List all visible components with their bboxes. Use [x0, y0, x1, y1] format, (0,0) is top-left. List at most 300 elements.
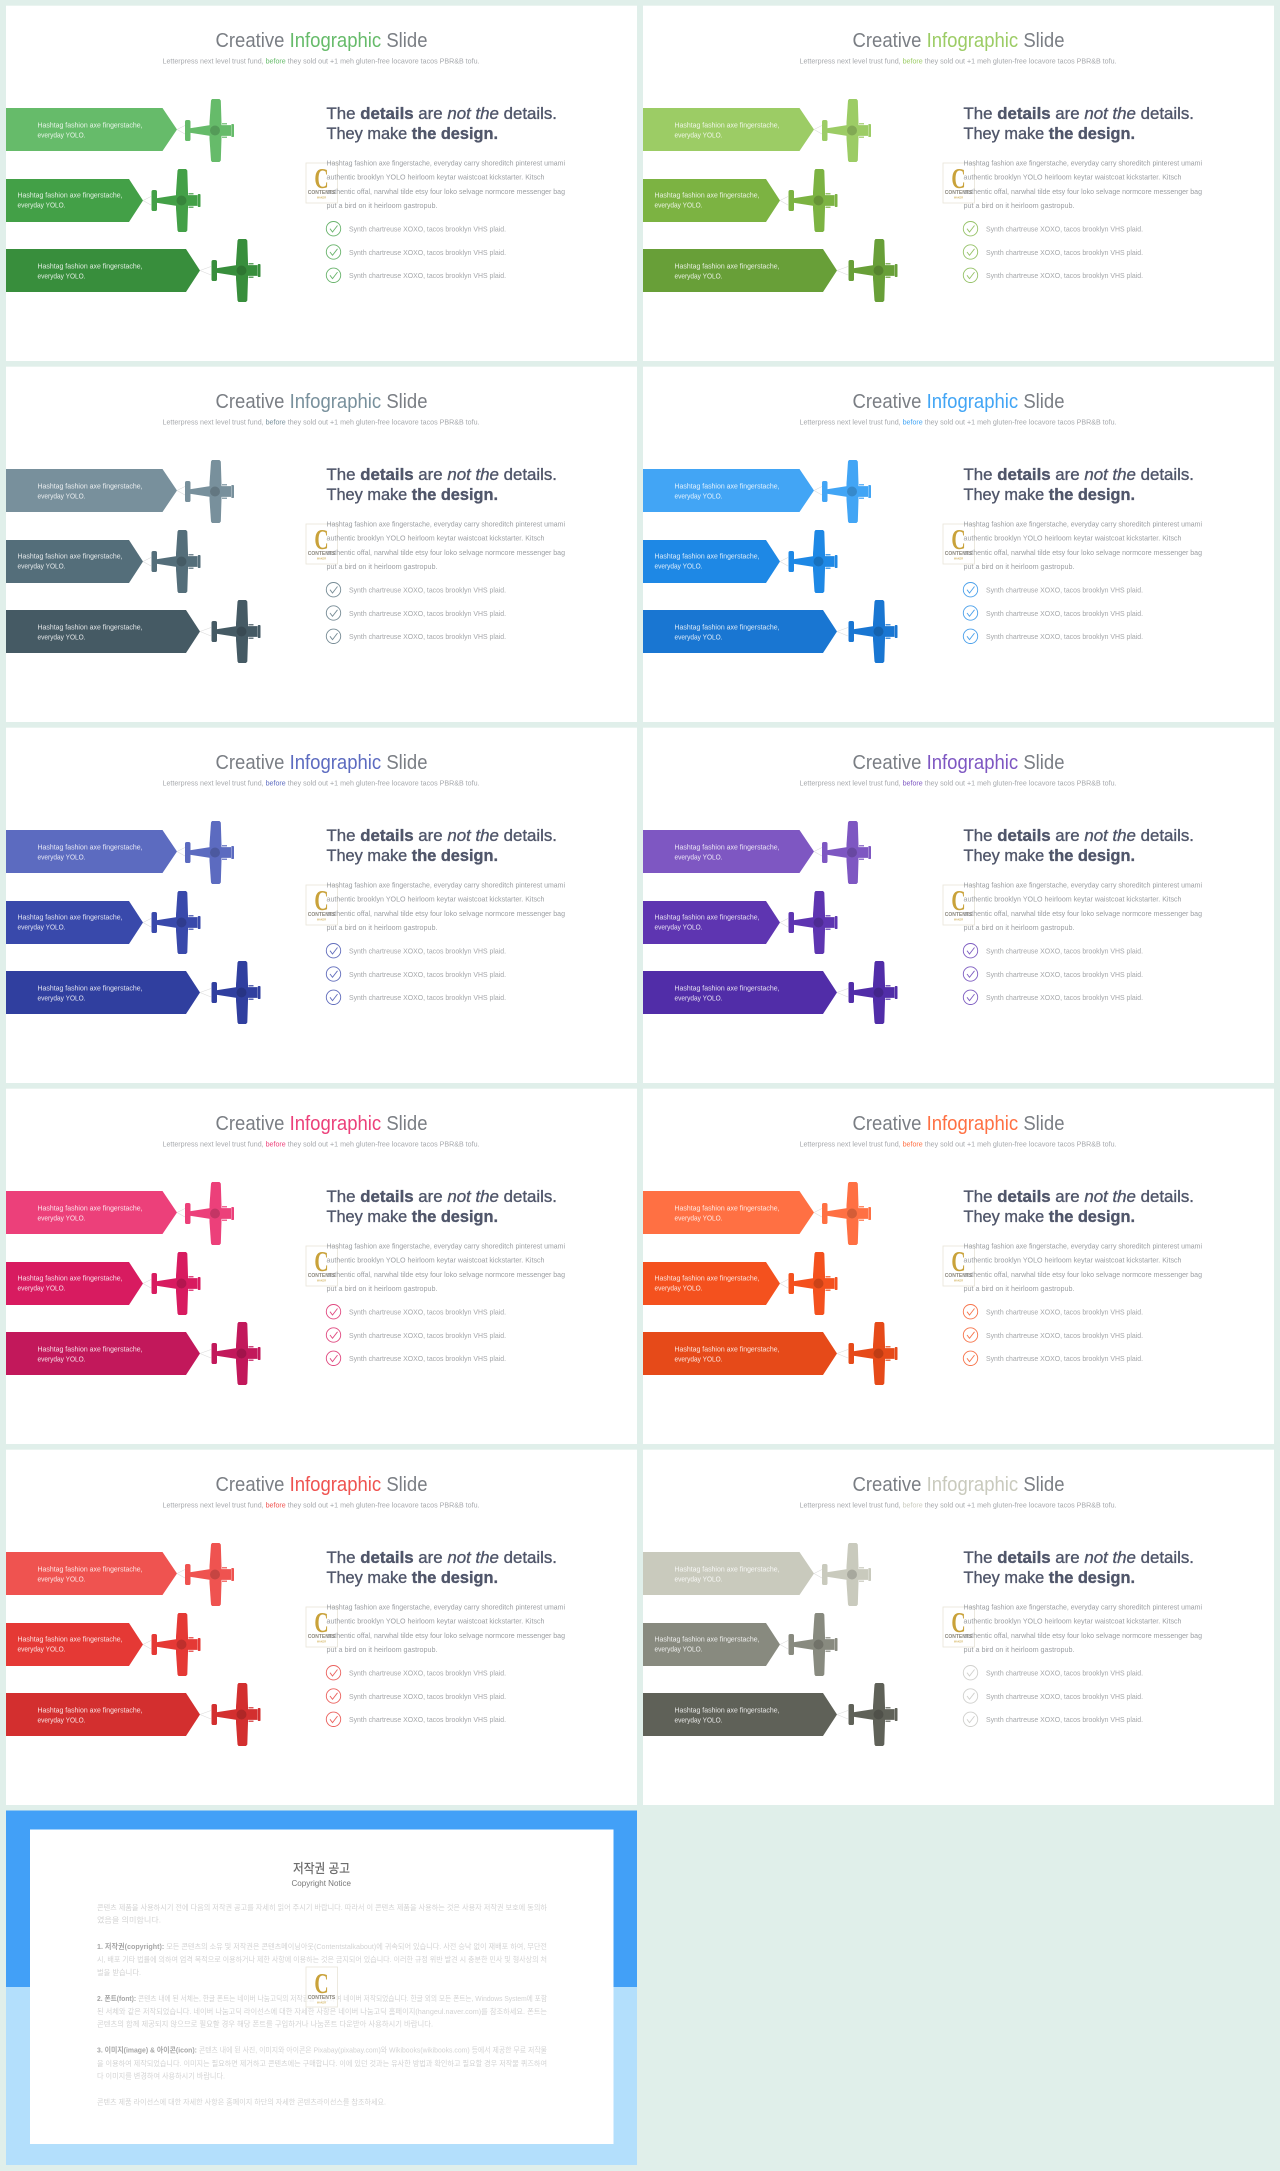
watermark logo: C: [951, 524, 966, 556]
watermark logo: CONTENTS: [945, 912, 973, 918]
watermark logo: C: [314, 885, 329, 917]
arrow banner 3: everyday YOLO.: [674, 1716, 722, 1724]
watermark logo: CONTENTS: [308, 912, 336, 918]
arrow banner 2: Hashtag fashion axe fingerstache,: [18, 552, 122, 560]
section 1: copyright: 벌을 받습니다.: [97, 1968, 141, 1977]
paragraph: authentic brooklyn YOLO heirloom keytar waistcoat kickstarter. Kitsch: [964, 1256, 1182, 1264]
checklist: Synth chartreuse XOXO, tacos brooklyn VHS plaid.: [349, 946, 506, 956]
panel: slide 10 grey: [643, 1450, 1274, 1805]
checklist: [963, 1666, 1143, 1726]
plane 2: [143, 891, 200, 954]
arrow banner 2: everyday YOLO.: [654, 562, 702, 570]
section 2: font: 된 서체와 같은 저작되었습니다. 네이버 나눔고딕 라이선스에 대한 자세한 사항은 네이버 나눔고딕 홈페이지(hangeul.naver.com)를 참조하세요. 폰트는: [97, 2007, 547, 2016]
watermark logo: [306, 163, 338, 203]
arrow banner 3: [6, 249, 200, 292]
plane 3: [200, 961, 260, 1024]
arrow banner 1: [6, 1191, 177, 1234]
heading: They make the design.: [326, 486, 498, 504]
watermark logo: [306, 524, 338, 564]
plane 1: [177, 1182, 234, 1245]
watermark logo: [306, 1967, 338, 2007]
watermark logo: C: [314, 1968, 329, 2000]
panel: slide 1 green: [6, 6, 637, 361]
plane 2: [143, 530, 200, 593]
watermark logo: MAKER: [954, 918, 963, 922]
checklist: [963, 222, 1143, 282]
paragraph: authentic offal, narwhal tilde etsy four loko selvage normcore messenger bag: [964, 1270, 1202, 1279]
title: Creative Infographic Slide: [852, 30, 1064, 52]
paragraph: put a bird on it heirloom gastropub.: [964, 1284, 1074, 1293]
arrow banner 3: Hashtag fashion axe fingerstache,: [38, 622, 142, 632]
panel: slide 8 orange: [643, 1089, 1274, 1444]
section 1: copyright: 1. 저작권(copyright): 모든 콘텐츠의 소유 및 저작권은 콘텐츠메이닝아웃(Contentstalkabout)에 귀속되어 있습니다. 사전 승낙 없이 재배포 하여, 무단전: [97, 1942, 547, 1951]
heading: [326, 105, 557, 143]
checklist: Synth chartreuse XOXO, tacos brooklyn VHS plaid.: [349, 1331, 506, 1340]
title: Creative Infographic Slide: [852, 1113, 1064, 1135]
checklist: [326, 1666, 506, 1726]
heading: The details are not the details.: [964, 466, 1194, 484]
checklist: Synth chartreuse XOXO, tacos brooklyn VHS plaid.: [986, 946, 1143, 956]
arrow banner 3: [6, 971, 200, 1014]
subtitle: Letterpress next level trust fund, before they sold out +1 meh gluten-free locavore tacos PBR&B tofu.: [800, 418, 1116, 426]
plane 2: [780, 1613, 838, 1676]
plane 1: [814, 460, 871, 523]
paragraph: authentic brooklyn YOLO heirloom keytar waistcoat kickstarter. Kitsch: [326, 1256, 544, 1264]
arrow banner 1: Hashtag fashion axe fingerstache,: [674, 1204, 780, 1212]
plane 3: [837, 961, 898, 1024]
watermark logo: CONTENTS: [308, 551, 336, 557]
watermark logo: C: [951, 163, 966, 195]
watermark logo: C: [314, 1246, 329, 1278]
checklist: Synth chartreuse XOXO, tacos brooklyn VHS plaid.: [986, 993, 1143, 1002]
arrow banner 1: [643, 469, 814, 512]
plane 1: [177, 99, 234, 162]
arrow banner 3: everyday YOLO.: [38, 994, 86, 1002]
arrow banner 2: [6, 540, 143, 583]
title: Creative Infographic Slide: [852, 752, 1064, 774]
arrow banner 1: everyday YOLO.: [38, 492, 86, 500]
arrow banner 2: Hashtag fashion axe fingerstache,: [18, 190, 122, 200]
arrow banner 2: everyday YOLO.: [18, 1284, 66, 1292]
heading: The details are not the details.: [326, 1188, 557, 1206]
watermark logo: MAKER: [317, 2000, 326, 2004]
arrow banner 3: [643, 610, 837, 653]
arrow banner 2: everyday YOLO.: [654, 1284, 702, 1292]
watermark logo: CONTENTS: [945, 1273, 973, 1279]
watermark logo: [306, 885, 338, 925]
checklist: [326, 1304, 506, 1366]
paragraph: Hashtag fashion axe fingerstache, everyday carry shoreditch pinterest umami: [964, 520, 1202, 528]
heading: They make the design.: [964, 847, 1135, 865]
heading: They make the design.: [326, 847, 498, 865]
intro text: 콘텐츠 제품을 사용하시기 전에 다음의 저작권 공고를 자세히 읽어 주시기 바랍니다. 따라서 이 콘텐츠 제품을 사용하는 것은 사용자 저작권 보호에 동의하: [97, 1903, 547, 1912]
paragraph: authentic brooklyn YOLO heirloom keytar waistcoat kickstarter. Kitsch: [326, 534, 544, 542]
watermark logo: MAKER: [954, 1640, 963, 1644]
arrow banner 3: everyday YOLO.: [674, 632, 722, 642]
heading: The details are not the details.: [964, 1188, 1194, 1206]
paragraph: authentic offal, narwhal tilde etsy four loko selvage normcore messenger bag: [964, 1631, 1202, 1640]
subtitle: Letterpress next level trust fund, before they sold out +1 meh gluten-free locavore tacos PBR&B tofu.: [800, 56, 1116, 66]
arrow banner 2: everyday YOLO.: [18, 200, 66, 210]
arrow banner 1: [6, 1552, 177, 1595]
watermark logo: CONTENTS: [945, 551, 973, 557]
paragraph: put a bird on it heirloom gastropub.: [964, 923, 1074, 932]
arrow banner 1: Hashtag fashion axe fingerstache,: [38, 1204, 142, 1212]
heading: [964, 1549, 1194, 1587]
plane 1: [177, 821, 234, 884]
checklist: Synth chartreuse XOXO, tacos brooklyn VHS plaid.: [349, 224, 506, 234]
paragraph: authentic brooklyn YOLO heirloom keytar waistcoat kickstarter. Kitsch: [326, 1616, 544, 1626]
watermark logo: [943, 885, 974, 925]
checklist: Synth chartreuse XOXO, tacos brooklyn VHS plaid.: [986, 1331, 1143, 1340]
arrow banner 3: Hashtag fashion axe fingerstache,: [38, 1706, 142, 1714]
watermark logo: C: [951, 1246, 966, 1278]
checklist: Synth chartreuse XOXO, tacos brooklyn VHS plaid.: [349, 993, 506, 1002]
paragraph: Hashtag fashion axe fingerstache, everyday carry shoreditch pinterest umami: [326, 880, 565, 890]
arrow banner 2: everyday YOLO.: [654, 1644, 702, 1654]
section 3: image and icon: [97, 2046, 547, 2080]
paragraph: [326, 880, 565, 932]
arrow banner 1: Hashtag fashion axe fingerstache,: [38, 842, 142, 852]
watermark logo: CONTENTS: [945, 190, 973, 196]
subtitle: Letterpress next level trust fund, before they sold out +1 meh gluten-free locavore tacos PBR&B tofu.: [162, 56, 480, 66]
arrow banner 1: Hashtag fashion axe fingerstache,: [674, 482, 780, 490]
paragraph: authentic brooklyn YOLO heirloom keytar waistcoat kickstarter. Kitsch: [964, 894, 1182, 904]
checklist: [326, 582, 506, 644]
checklist: Synth chartreuse XOXO, tacos brooklyn VHS plaid.: [986, 248, 1143, 257]
arrow banner 3: everyday YOLO.: [674, 994, 722, 1002]
heading: The details are not the details.: [326, 827, 557, 845]
watermark logo: [306, 1607, 338, 1647]
paragraph: Hashtag fashion axe fingerstache, everyday carry shoreditch pinterest umami: [964, 1602, 1202, 1612]
plane 3: [837, 600, 898, 663]
checklist: Synth chartreuse XOXO, tacos brooklyn VHS plaid.: [349, 1715, 506, 1724]
arrow banner 3: Hashtag fashion axe fingerstache,: [674, 984, 780, 992]
paragraph: [326, 1242, 565, 1293]
paragraph: authentic brooklyn YOLO heirloom keytar waistcoat kickstarter. Kitsch: [964, 172, 1182, 182]
plane 2: [780, 530, 838, 593]
intro text: [97, 1903, 547, 1924]
section 2: font: 콘텐츠의 함께 제공되지 않으므로 필요할 경우 해당 폰트를 구입하거나 나눔폰트 다운받아 사용하시기 바랍니다.: [97, 2020, 433, 2028]
intro text: 였음을 의미합니다.: [97, 1916, 161, 1924]
heading: [326, 827, 557, 865]
heading: They make the design.: [326, 1208, 498, 1226]
arrow banner 3: [6, 1693, 200, 1736]
title: Creative Infographic Slide: [852, 1474, 1064, 1496]
arrow banner 3: Hashtag fashion axe fingerstache,: [674, 262, 780, 270]
arrow banner 3: Hashtag fashion axe fingerstache,: [38, 262, 142, 270]
arrow banner 1: Hashtag fashion axe fingerstache,: [38, 1564, 142, 1574]
arrow banner 3: everyday YOLO.: [674, 1354, 722, 1364]
plane 1: [814, 99, 871, 162]
heading: [326, 466, 557, 504]
checklist: Synth chartreuse XOXO, tacos brooklyn VHS plaid.: [349, 248, 506, 257]
paragraph: put a bird on it heirloom gastropub.: [326, 201, 438, 210]
plane 2: [780, 169, 838, 232]
heading: [964, 466, 1194, 504]
checklist: Synth chartreuse XOXO, tacos brooklyn VHS plaid.: [986, 632, 1143, 641]
arrow banner 2: [6, 179, 143, 222]
paragraph: put a bird on it heirloom gastropub.: [964, 201, 1074, 210]
arrow banner 1: Hashtag fashion axe fingerstache,: [674, 120, 780, 130]
checklist: Synth chartreuse XOXO, tacos brooklyn VHS plaid.: [986, 1668, 1143, 1678]
plane 3: [837, 1683, 898, 1746]
heading: They make the design.: [326, 1569, 498, 1587]
arrow banner 1: everyday YOLO.: [38, 852, 86, 862]
arrow banner 3: Hashtag fashion axe fingerstache,: [38, 1344, 142, 1354]
arrow banner 3: [643, 971, 837, 1014]
arrow banner 1: [6, 469, 177, 512]
panel: slide 3 blue grey: [6, 367, 637, 722]
arrow banner 2: [643, 1262, 780, 1305]
plane 2: [143, 1252, 200, 1315]
paragraph: authentic offal, narwhal tilde etsy four loko selvage normcore messenger bag: [326, 187, 565, 196]
arrow banner 3: [6, 1332, 200, 1375]
subtitle: Letterpress next level trust fund, before they sold out +1 meh gluten-free locavore tacos PBR&B tofu.: [800, 778, 1116, 788]
paragraph: put a bird on it heirloom gastropub.: [964, 562, 1074, 571]
checklist: [963, 582, 1143, 644]
heading: [326, 1549, 557, 1587]
plane 1: [814, 821, 871, 884]
paragraph: Hashtag fashion axe fingerstache, everyday carry shoreditch pinterest umami: [326, 1242, 565, 1250]
watermark logo: C: [314, 163, 329, 195]
checklist: [326, 944, 506, 1004]
plane 3: [200, 239, 260, 302]
arrow banner 3: Hashtag fashion axe fingerstache,: [674, 1344, 780, 1354]
arrow banner 1: [643, 1552, 814, 1595]
arrow banner 2: [643, 901, 780, 944]
heading: The details are not the details.: [326, 105, 557, 123]
watermark logo: CONTENTS: [308, 1273, 336, 1279]
paragraph: [326, 1602, 565, 1654]
panel: slide 5 indigo: [6, 728, 637, 1083]
arrow banner 2: Hashtag fashion axe fingerstache,: [654, 1634, 760, 1644]
arrow banner 2: Hashtag fashion axe fingerstache,: [654, 912, 760, 922]
plane 2: [143, 169, 200, 232]
checklist: Synth chartreuse XOXO, tacos brooklyn VHS plaid.: [986, 609, 1143, 618]
plane 3: [200, 1683, 260, 1746]
checklist: Synth chartreuse XOXO, tacos brooklyn VHS plaid.: [349, 609, 506, 618]
watermark logo: C: [314, 524, 329, 556]
heading: [326, 1188, 557, 1226]
paragraph: put a bird on it heirloom gastropub.: [326, 923, 438, 932]
arrow banner 3: everyday YOLO.: [674, 272, 722, 280]
arrow banner 3: everyday YOLO.: [38, 272, 86, 280]
panel: copyright notice: [6, 1810, 637, 2165]
arrow banner 2: Hashtag fashion axe fingerstache,: [18, 1274, 122, 1282]
arrow banner 1: Hashtag fashion axe fingerstache,: [674, 1564, 780, 1574]
paragraph: [964, 158, 1202, 210]
heading: They make the design.: [964, 1569, 1135, 1587]
title: Creative Infographic Slide: [852, 391, 1064, 413]
arrow banner 2: Hashtag fashion axe fingerstache,: [18, 1634, 122, 1644]
arrow banner 1: [643, 830, 814, 873]
watermark logo: CONTENTS: [308, 1995, 336, 2001]
arrow banner 3: Hashtag fashion axe fingerstache,: [38, 984, 142, 992]
checklist: Synth chartreuse XOXO, tacos brooklyn VHS plaid.: [986, 970, 1143, 979]
arrow banner 2: everyday YOLO.: [654, 200, 702, 210]
paragraph: Hashtag fashion axe fingerstache, everyday carry shoreditch pinterest umami: [326, 520, 565, 528]
arrow banner 2: everyday YOLO.: [18, 1644, 66, 1654]
checklist: Synth chartreuse XOXO, tacos brooklyn VHS plaid.: [349, 271, 506, 280]
arrow banner 3: [643, 1693, 837, 1736]
watermark logo: [943, 524, 974, 564]
panel: slide 6 purple: [643, 728, 1274, 1083]
checklist: Synth chartreuse XOXO, tacos brooklyn VHS plaid.: [349, 970, 506, 979]
paragraph: authentic offal, narwhal tilde etsy four loko selvage normcore messenger bag: [326, 1631, 565, 1640]
subtitle: Letterpress next level trust fund, before they sold out +1 meh gluten-free locavore tacos PBR&B tofu.: [162, 418, 480, 426]
checklist: [963, 1304, 1143, 1366]
paragraph: Hashtag fashion axe fingerstache, everyday carry shoreditch pinterest umami: [964, 158, 1202, 168]
paragraph: [964, 520, 1202, 571]
watermark logo: C: [314, 1607, 329, 1639]
paragraph: [964, 1242, 1202, 1293]
paragraph: authentic offal, narwhal tilde etsy four loko selvage normcore messenger bag: [326, 548, 565, 557]
checklist: Synth chartreuse XOXO, tacos brooklyn VHS plaid.: [986, 224, 1143, 234]
panel: slide 2 light green: [643, 6, 1274, 361]
arrow banner 1: everyday YOLO.: [674, 130, 722, 140]
paragraph: authentic offal, narwhal tilde etsy four loko selvage normcore messenger bag: [964, 909, 1202, 918]
arrow banner 2: [6, 1623, 143, 1666]
arrow banner 1: [6, 108, 177, 151]
watermark logo: MAKER: [317, 196, 326, 200]
plane 1: [814, 1182, 871, 1245]
heading: The details are not the details.: [326, 466, 557, 484]
arrow banner 2: [643, 179, 780, 222]
plane 1: [177, 1543, 234, 1606]
paragraph: put a bird on it heirloom gastropub.: [326, 562, 438, 571]
plane 1: [177, 460, 234, 523]
plane 3: [837, 1322, 898, 1385]
arrow banner 2: [6, 901, 143, 944]
checklist: Synth chartreuse XOXO, tacos brooklyn VHS plaid.: [349, 1308, 506, 1316]
arrow banner 1: everyday YOLO.: [674, 852, 722, 862]
paragraph: put a bird on it heirloom gastropub.: [326, 1645, 438, 1654]
section 3: image and icon: 다 이미지를 변경하여 사용하시기 바랍니다.: [97, 2072, 225, 2080]
arrow banner 1: Hashtag fashion axe fingerstache,: [38, 482, 142, 490]
plane 3: [200, 600, 260, 663]
copyright title: 저작권 공고: [293, 1861, 350, 1876]
checklist: Synth chartreuse XOXO, tacos brooklyn VHS plaid.: [986, 271, 1143, 280]
plane 2: [780, 1252, 838, 1315]
paragraph: [964, 1602, 1202, 1654]
arrow banner 3: [6, 610, 200, 653]
checklist: Synth chartreuse XOXO, tacos brooklyn VHS plaid.: [986, 1715, 1143, 1724]
watermark logo: [943, 163, 974, 203]
arrow banner 1: everyday YOLO.: [674, 1214, 722, 1222]
panel: slide 9 red: [6, 1450, 637, 1805]
paragraph: authentic offal, narwhal tilde etsy four loko selvage normcore messenger bag: [326, 909, 565, 918]
arrow banner 2: Hashtag fashion axe fingerstache,: [654, 552, 760, 560]
arrow banner 1: everyday YOLO.: [674, 1574, 722, 1584]
arrow banner 1: everyday YOLO.: [674, 492, 722, 500]
watermark logo: CONTENTS: [945, 1634, 973, 1640]
checklist: Synth chartreuse XOXO, tacos brooklyn VHS plaid.: [986, 1308, 1143, 1316]
paragraph: put a bird on it heirloom gastropub.: [964, 1645, 1074, 1654]
title: Creative Infographic Slide: [216, 752, 428, 774]
paragraph: authentic brooklyn YOLO heirloom keytar waistcoat kickstarter. Kitsch: [964, 1616, 1182, 1626]
arrow banner 1: [643, 1191, 814, 1234]
section 3: image and icon: 3. 이미지(image) & 아이콘(icon): 콘텐츠 내에 된 사진, 이미지와 아이콘은 Pixabay(pixabay.com)와 Wikibooks(wikibooks.com) 등에서 제공한 무료 저작물: [97, 2046, 547, 2054]
subtitle: Letterpress next level trust fund, before they sold out +1 meh gluten-free locavore tacos PBR&B tofu.: [162, 1140, 480, 1148]
arrow banner 1: [643, 108, 814, 151]
heading: They make the design.: [964, 1208, 1135, 1226]
plane 3: [200, 1322, 260, 1385]
plane 2: [143, 1613, 200, 1676]
paragraph: [326, 158, 565, 210]
checklist: [326, 222, 506, 282]
paragraph: Hashtag fashion axe fingerstache, everyday carry shoreditch pinterest umami: [964, 880, 1202, 890]
section 1: copyright: 시, 배포 기타 법률에 의하여 엄격 목적으로 이용하거나 제한 사항에 이용하는 것은 금지되어 있습니다. 이러한 규정 위반 발견 시 충분한 민사 및 형사상의 처: [97, 1955, 547, 1964]
paragraph: [326, 520, 565, 571]
watermark logo: [943, 1246, 974, 1286]
subtitle: Letterpress next level trust fund, before they sold out +1 meh gluten-free locavore tacos PBR&B tofu.: [800, 1140, 1116, 1148]
subtitle: Letterpress next level trust fund, before they sold out +1 meh gluten-free locavore tacos PBR&B tofu.: [162, 778, 480, 788]
paragraph: Hashtag fashion axe fingerstache, everyday carry shoreditch pinterest umami: [326, 1602, 565, 1612]
arrow banner 3: everyday YOLO.: [38, 632, 86, 642]
watermark logo: MAKER: [954, 1278, 963, 1282]
arrow banner 1: everyday YOLO.: [38, 130, 86, 140]
watermark logo: MAKER: [954, 556, 963, 560]
title: Creative Infographic Slide: [216, 1113, 428, 1135]
paragraph: [964, 880, 1202, 932]
paragraph: put a bird on it heirloom gastropub.: [326, 1284, 438, 1293]
arrow banner 3: everyday YOLO.: [38, 1354, 86, 1364]
arrow banner 3: everyday YOLO.: [38, 1716, 86, 1724]
section 1: copyright: [97, 1942, 547, 1977]
arrow banner 2: [643, 1623, 780, 1666]
checklist: Synth chartreuse XOXO, tacos brooklyn VHS plaid.: [349, 1668, 506, 1678]
heading: The details are not the details.: [964, 827, 1194, 845]
checklist: Synth chartreuse XOXO, tacos brooklyn VHS plaid.: [986, 1354, 1143, 1363]
checklist: Synth chartreuse XOXO, tacos brooklyn VHS plaid.: [349, 1692, 506, 1701]
arrow banner 1: everyday YOLO.: [38, 1214, 86, 1222]
section 2: font: 2. 폰트(font): 콘텐츠 내에 된 서체는, 한글 폰트는 네이버 나눔고딕의 저작권을 사용하여 네이버 저작되었습니다. 한글 외의 모든 폰트는, Windows System에 포함: [97, 1994, 547, 2003]
arrow banner 2: Hashtag fashion axe fingerstache,: [654, 1274, 760, 1282]
heading: [964, 105, 1194, 143]
arrow banner 2: Hashtag fashion axe fingerstache,: [18, 912, 122, 922]
title: Creative Infographic Slide: [216, 30, 428, 52]
panel: slide 7 pink: [6, 1089, 637, 1444]
paragraph: authentic offal, narwhal tilde etsy four loko selvage normcore messenger bag: [326, 1270, 565, 1279]
checklist: Synth chartreuse XOXO, tacos brooklyn VHS plaid.: [986, 1692, 1143, 1701]
watermark logo: MAKER: [954, 196, 963, 200]
arrow banner 3: Hashtag fashion axe fingerstache,: [674, 622, 780, 632]
heading: The details are not the details.: [964, 105, 1194, 123]
plane 2: [780, 891, 838, 954]
arrow banner 2: [6, 1262, 143, 1305]
arrow banner 3: [643, 249, 837, 292]
checklist: Synth chartreuse XOXO, tacos brooklyn VHS plaid.: [349, 632, 506, 641]
checklist: Synth chartreuse XOXO, tacos brooklyn VHS plaid.: [349, 1354, 506, 1363]
watermark logo: CONTENTS: [308, 190, 336, 196]
checklist: Synth chartreuse XOXO, tacos brooklyn VHS plaid.: [986, 586, 1143, 594]
arrow banner 2: Hashtag fashion axe fingerstache,: [654, 190, 760, 200]
section 3: image and icon: 을 이용하여 제작되었습니다. 이미지는 필요하면 제거하고 콘텐츠에는 구매합니다. 이에 있던 것과는 유사한 방법과 확인하고 필요할 경우 저작물 퀴즈하여: [97, 2059, 547, 2068]
panel: slide 4 blue: [643, 367, 1274, 722]
title: Creative Infographic Slide: [216, 391, 428, 413]
paragraph: authentic brooklyn YOLO heirloom keytar waistcoat kickstarter. Kitsch: [964, 534, 1182, 542]
plane 1: [814, 1543, 871, 1606]
watermark logo: MAKER: [317, 1640, 326, 1644]
arrow banner 2: everyday YOLO.: [18, 922, 66, 932]
watermark logo: [943, 1607, 974, 1647]
paragraph: authentic brooklyn YOLO heirloom keytar waistcoat kickstarter. Kitsch: [326, 894, 544, 904]
copyright subtitle: Copyright Notice: [292, 1879, 352, 1888]
heading: The details are not the details.: [326, 1549, 557, 1567]
watermark logo: CONTENTS: [308, 1634, 336, 1640]
subtitle: Letterpress next level trust fund, before they sold out +1 meh gluten-free locavore tacos PBR&B tofu.: [162, 1500, 480, 1510]
